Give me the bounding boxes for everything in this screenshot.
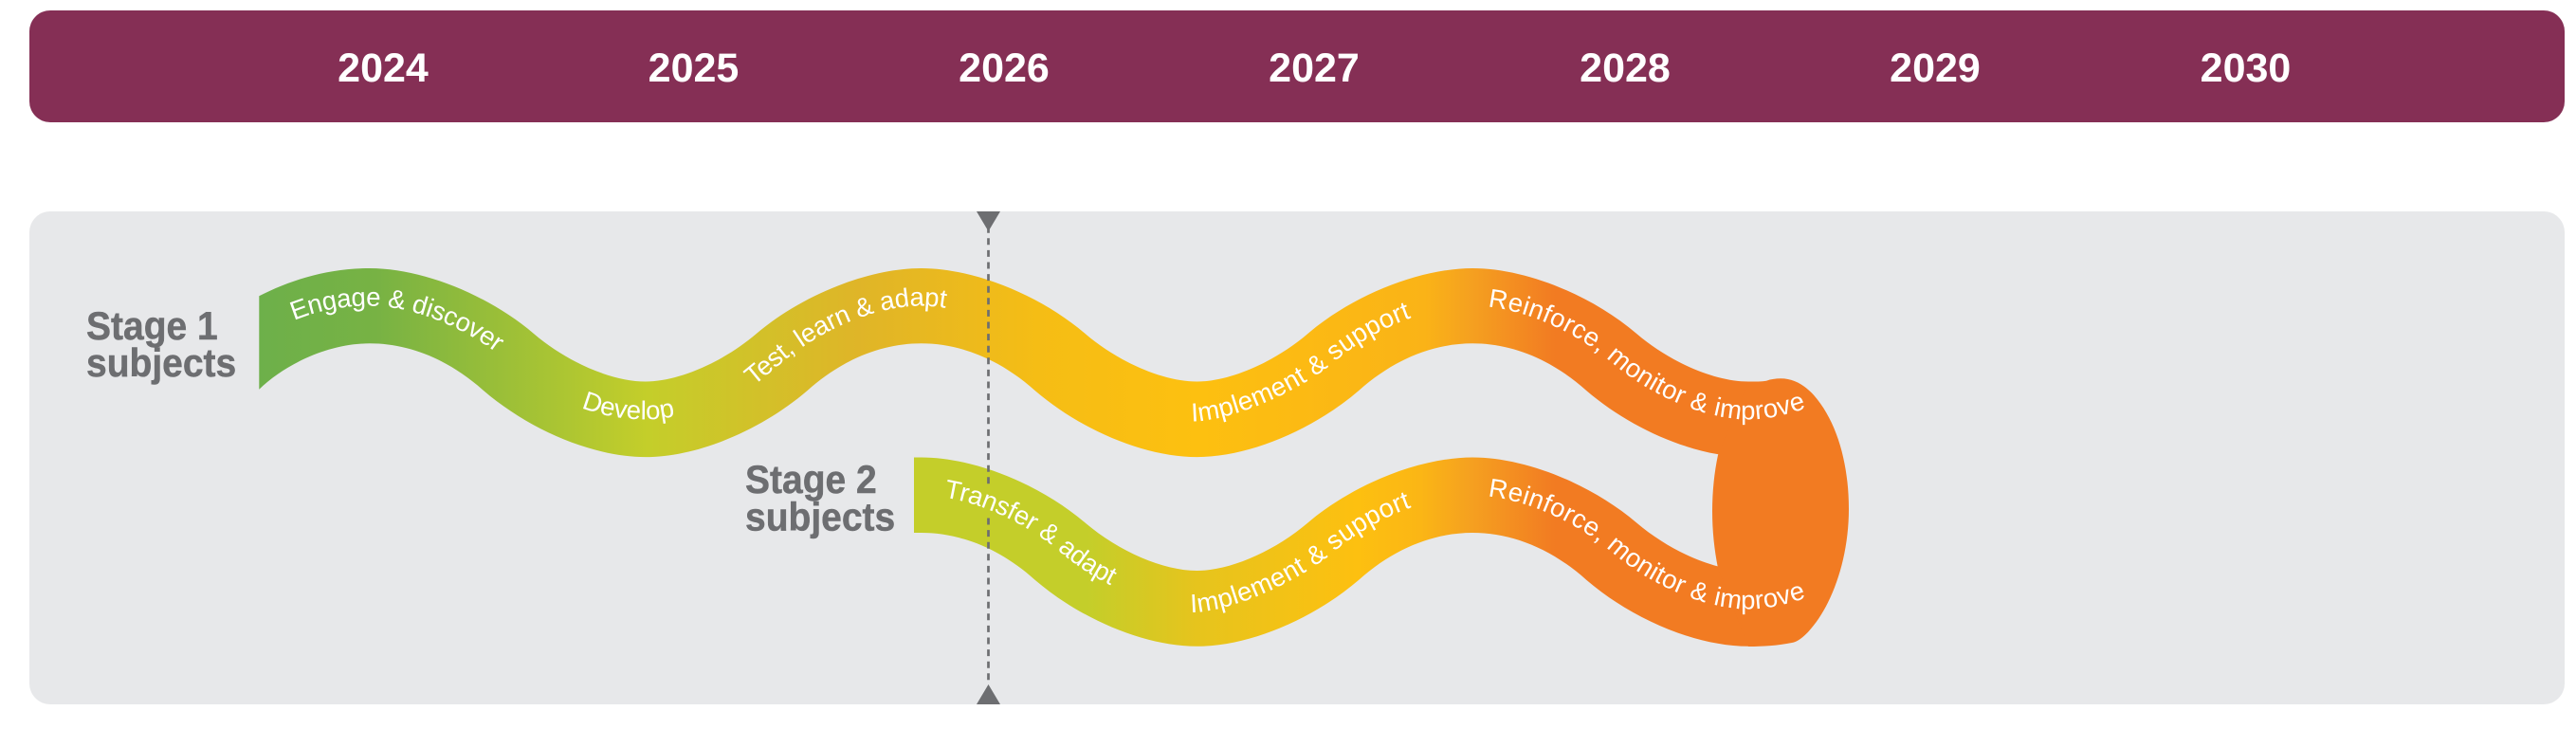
ribbon: stage 1 pathway xyxy=(259,268,1748,457)
label: engage and discover: Engage & discover xyxy=(290,290,504,350)
heading: stage 2 subjects: subjects xyxy=(745,495,895,539)
year 2028: 2028 xyxy=(1580,46,1671,91)
heading: stage 1 subjects: subjects xyxy=(86,341,236,385)
label: reinforce, monitor and improve, stage 2: Reinforce, monitor & improve xyxy=(1489,479,1804,614)
label: test, learn and adapt: Test, learn & adapt xyxy=(743,287,947,381)
milestone marker: dashed line with arrows xyxy=(977,211,1000,704)
label: transfer and adapt: Transfer & adapt xyxy=(947,480,1117,586)
ribbon: connector between stages xyxy=(1712,378,1849,647)
panel: timeline background xyxy=(29,211,2565,704)
label: develop: Develop xyxy=(583,392,673,424)
label: implement and support, stage 1: Implement & support xyxy=(1193,303,1411,423)
label: reinforce, monitor and improve, stage 1: Reinforce, monitor & improve xyxy=(1489,289,1804,425)
ribbon: stage 2 pathway xyxy=(914,457,1748,647)
heading: stage 1 subjects: Stage 1 xyxy=(86,304,218,348)
year 2027: 2027 xyxy=(1269,46,1360,91)
label: implement and support, stage 2: Implement & support xyxy=(1192,493,1411,613)
year header bar xyxy=(29,10,2565,122)
heading: stage 2 subjects: Stage 2 xyxy=(745,458,877,501)
year 2025: 2025 xyxy=(649,46,739,91)
year 2024: 2024 xyxy=(338,46,429,91)
year 2029: 2029 xyxy=(1890,46,1981,91)
year 2026: 2026 xyxy=(959,46,1050,91)
year 2030: 2030 xyxy=(2201,46,2291,91)
